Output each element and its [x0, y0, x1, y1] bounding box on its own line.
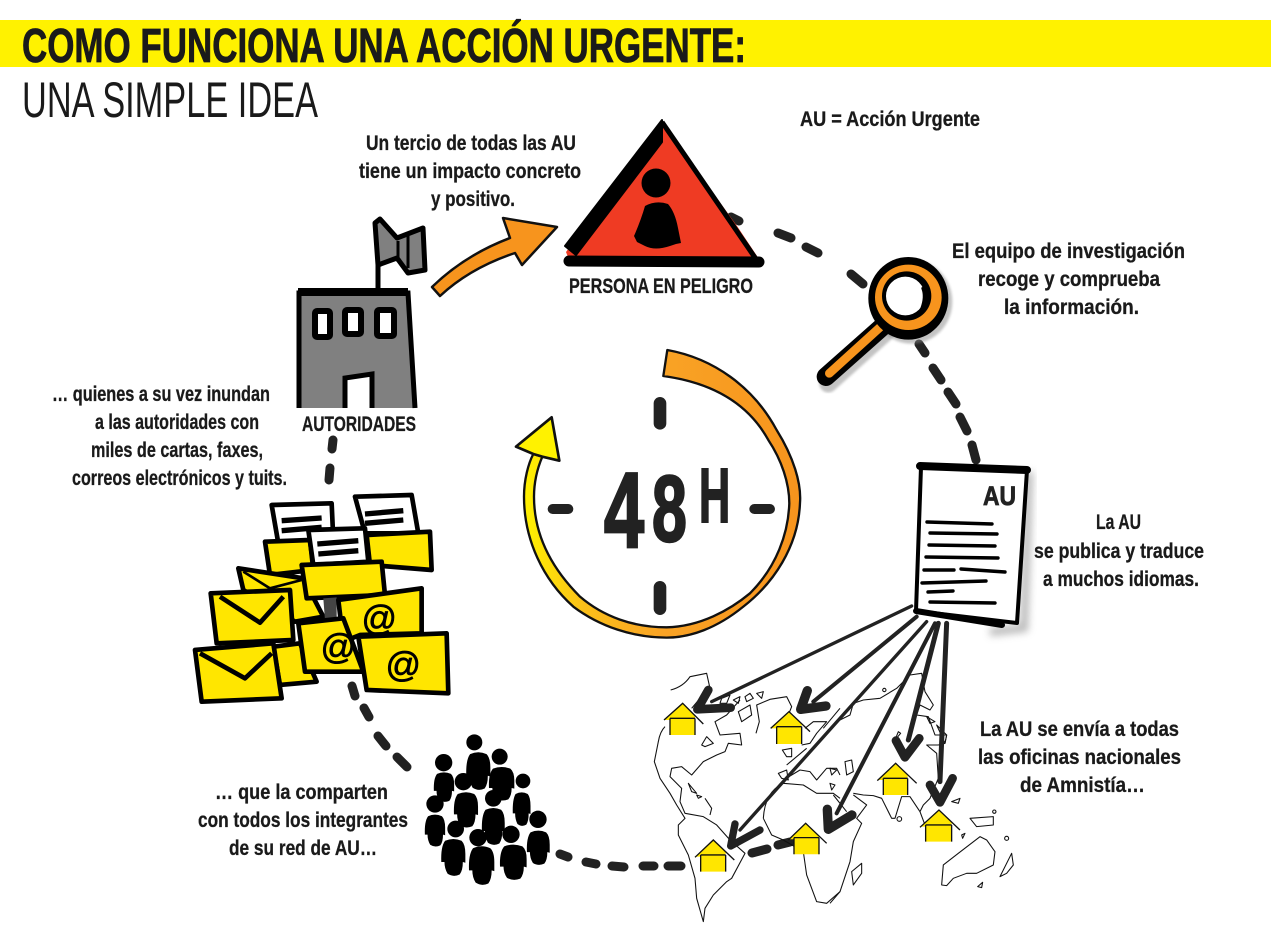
paper center: [308, 528, 368, 565]
house: africa: [788, 823, 827, 854]
icon: pile of letters and envelopes: @: [386, 646, 421, 685]
legend: AU abbreviation: AU = Acción Urgente: [800, 108, 980, 131]
icons: houses for national offices: [664, 703, 960, 872]
envelope at mid: [298, 618, 363, 672]
icon: 48-hour clock with circular arrow: [516, 350, 800, 638]
envelope left: [211, 590, 293, 643]
text: flood authorities: [52, 383, 287, 490]
house: india: [877, 763, 917, 795]
label: persona en peligro: PERSONA EN PELIGRO: [569, 275, 753, 298]
text: impact: Un tercio de todas las AU: [366, 132, 576, 155]
text: flood authorities: … quienes a su vez inundan: [52, 383, 270, 406]
title band: [0, 20, 1271, 67]
arrow: authorities to person: [432, 218, 557, 296]
text: impact: [359, 132, 581, 211]
arrows from document to offices: [697, 606, 953, 846]
text: sent to offices: de Amnistía…: [1020, 774, 1145, 797]
text: research team: recoge y comprueba: [978, 268, 1160, 291]
envelope at front: [358, 633, 448, 693]
map: east part: [830, 673, 1013, 903]
icon: group of people: [425, 734, 550, 885]
text: AU published: [1034, 511, 1204, 591]
text: flood authorities: miles de cartas, faxes,: [91, 439, 263, 462]
text: impact: tiene un impacto concreto: [359, 160, 581, 183]
icon: AU document: [916, 466, 1029, 632]
text: share with network: de su red de AU…: [229, 837, 377, 860]
text: flood authorities: correos electrónicos y tuits.: [72, 467, 287, 490]
envelope front left: [195, 643, 282, 702]
text: sent to offices: [978, 718, 1181, 797]
label: autoridades: AUTORIDADES: [302, 413, 416, 436]
envelope low back: [273, 643, 317, 685]
big label 48H: [604, 452, 730, 570]
text: research team: la información.: [1004, 296, 1139, 319]
big label 48H: H: [699, 454, 730, 539]
paper sliver between envelopes: [323, 597, 337, 620]
world map: [654, 673, 1013, 922]
dashed cycle path: [329, 217, 976, 867]
text: flood authorities: a las autoridades con: [95, 411, 259, 434]
paper right: [355, 495, 418, 533]
envelope back left: [238, 568, 323, 622]
big label 48H: 8: [652, 456, 687, 561]
house: north america: [664, 703, 703, 735]
icon: pile of letters and envelopes: @: [321, 627, 356, 666]
map: west part: [654, 673, 840, 922]
text: sent to offices: las oficinas nacionales: [978, 746, 1181, 769]
icon: authorities building: [298, 219, 425, 408]
icon: danger triangle, person in danger: [565, 120, 761, 263]
subtitle: UNA SIMPLE IDEA: [22, 72, 318, 128]
text: share with network: … que la comparten: [215, 781, 388, 804]
text: AU published: a muchos idiomas.: [1043, 568, 1199, 591]
text: impact: y positivo.: [431, 188, 515, 211]
icon: pile of letters and envelopes: @: [362, 599, 397, 638]
text: share with network: [198, 781, 408, 860]
paper left: [272, 503, 333, 543]
text: sent to offices: La AU se envía a todas: [980, 718, 1179, 741]
title: COMO FUNCIONA UNA ACCIÓN URGENTE:: [22, 18, 746, 73]
envelope at right upper: [338, 588, 422, 642]
label: AU on document: AU: [983, 481, 1016, 511]
text: AU published: se publica y traduce: [1034, 540, 1204, 563]
text: research team: [952, 240, 1185, 319]
icon: magnifying glass: [826, 257, 952, 383]
house: europe: [771, 712, 810, 744]
icon: pile of letters and envelopes: [195, 495, 448, 702]
text: AU published: La AU: [1096, 511, 1141, 534]
big label 48H: 4: [604, 452, 644, 570]
text: share with network: con todos los integrantes: [198, 809, 408, 832]
text: research team: El equipo de investigación: [952, 240, 1185, 263]
house: southeast asia: [920, 810, 960, 842]
house: south america: [695, 840, 734, 872]
